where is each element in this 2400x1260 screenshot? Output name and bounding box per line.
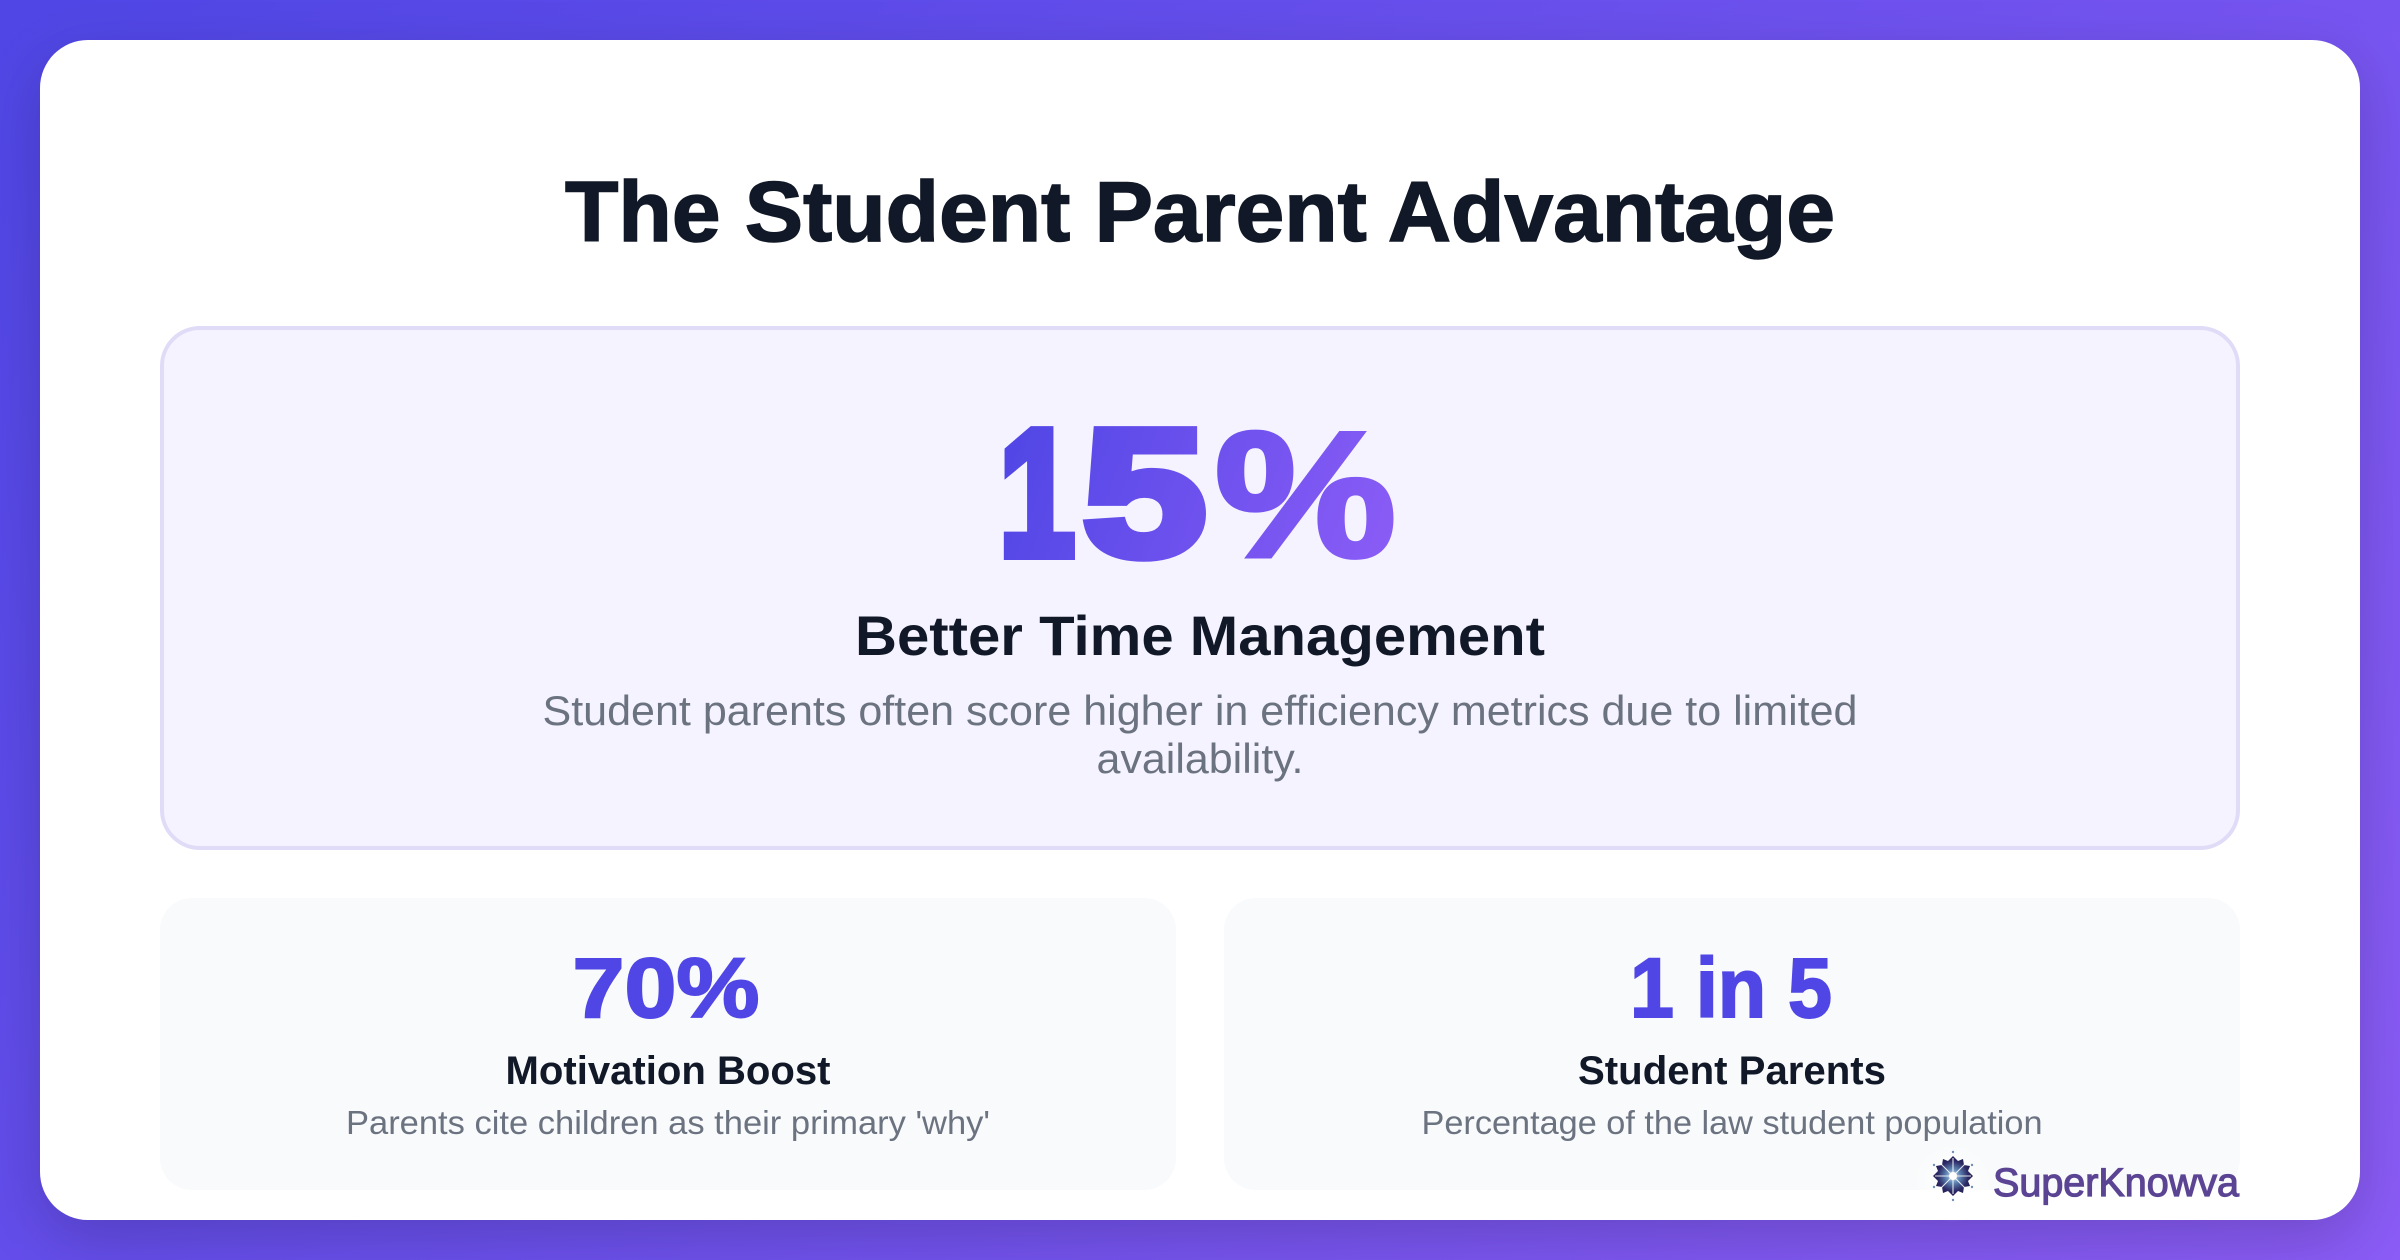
- panel: student parents: [1224, 898, 2240, 1190]
- hero description: Student parents often score higher in efficiency metrics due to limited: [542, 687, 1858, 734]
- panel: motivation boost: [160, 898, 1176, 1190]
- panel heading: Motivation Boost: [506, 1049, 830, 1093]
- panel description: Percentage of the law student population: [1422, 1104, 2042, 1141]
- title: The Student Parent Advantage: [565, 165, 1835, 260]
- big number 15%: 1: [999, 393, 1075, 594]
- hero description: availability.: [1096, 735, 1304, 782]
- stat 70%: 70%: [572, 941, 760, 1035]
- hero heading: Better Time Management: [855, 604, 1545, 667]
- panel background: [1224, 898, 2240, 1190]
- hero description: [542, 687, 1858, 782]
- logo: SuperKnowva: [1911, 1142, 2240, 1222]
- big number 15%: [999, 393, 1396, 594]
- big number 15%: 5: [1083, 393, 1206, 594]
- panel heading: Student Parents: [1578, 1049, 1886, 1093]
- panel: hero statistic: [162, 328, 2238, 848]
- big number 15%: %: [1215, 395, 1396, 594]
- logo halo: [1911, 1142, 1995, 1222]
- stat 1 in 5: 1 in 5: [1630, 941, 1832, 1035]
- panel description: Parents cite children as their primary 'why': [346, 1104, 990, 1141]
- panel background: [160, 898, 1176, 1190]
- logo wordmark: SuperKnowva: [1993, 1161, 2240, 1205]
- hero panel background: [162, 328, 2238, 848]
- icon: starburst: [1933, 1151, 1973, 1201]
